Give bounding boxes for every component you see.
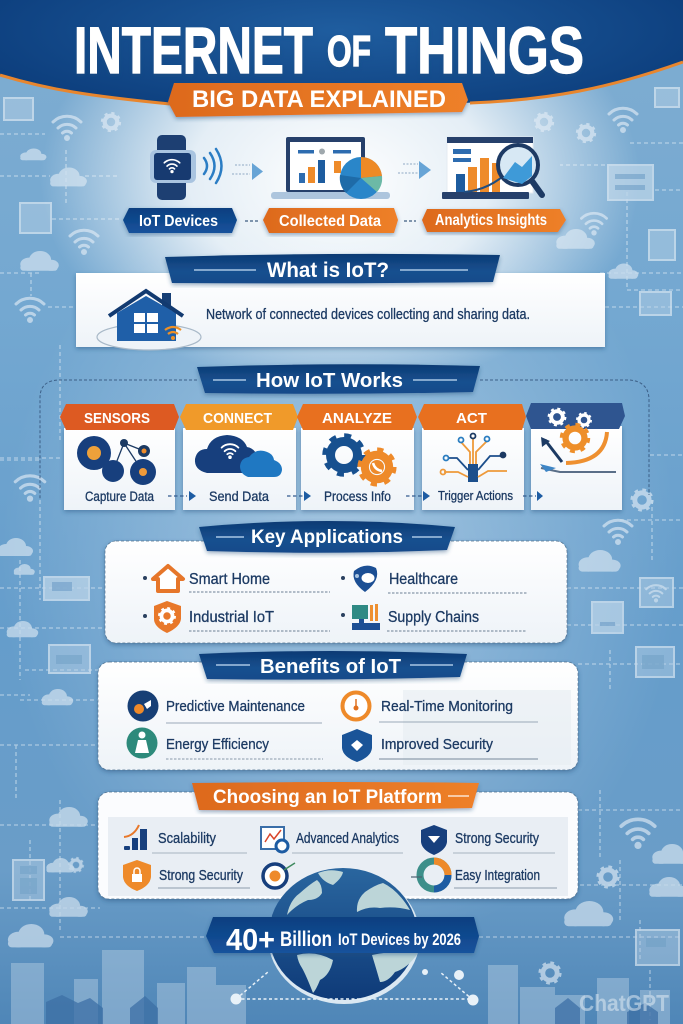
application: Supply Chains [341, 604, 527, 631]
application: Healthcare [341, 566, 527, 593]
criterion: Scalability [124, 825, 247, 853]
criterion: Strong Security [421, 825, 555, 855]
arrow: data to insights [398, 161, 431, 179]
benefit: Energy Efficiency [126, 728, 323, 759]
card: act [418, 404, 526, 510]
icon: smartwatch [150, 135, 222, 200]
card: connect [180, 404, 298, 510]
icon: laptop with charts [271, 137, 390, 199]
panel: benefits of IoT [98, 662, 578, 770]
flow arrows [168, 491, 543, 501]
label: IoT Devices: IoT Devices [139, 213, 218, 230]
card: connect: CONNECT [203, 410, 272, 427]
title [74, 13, 584, 87]
heading: How IoT Works: How IoT Works [256, 370, 403, 392]
criterion: Easy Integration: Easy Integration [455, 868, 540, 884]
label: Collected Data: Collected Data [279, 213, 381, 230]
heading: Benefits of IoT: Benefits of IoT [260, 656, 401, 678]
subtitle banner [168, 83, 468, 117]
criterion: Advanced Analytics: Advanced Analytics [296, 831, 399, 847]
icon: gears and cycle [540, 409, 616, 472]
icon: sensor network [77, 436, 156, 485]
card: analyze: Process Info [324, 488, 391, 504]
card: sensors: Capture Data [85, 489, 154, 504]
heading: Choosing an IoT Platform [192, 782, 479, 810]
card: act: Trigger Actions [438, 488, 513, 503]
panel: what is IoT [76, 273, 605, 350]
card: analyze [297, 404, 417, 510]
criterion: Strong Security (lock): Strong Security [159, 868, 244, 884]
icon: cloud wifi [195, 435, 282, 477]
stat banner: IoT Devices by 2026 [338, 931, 461, 949]
connector dashes [245, 220, 416, 222]
icon: smart home [97, 291, 201, 350]
criterion: Scalability: Scalability [158, 831, 217, 847]
application: Industrial IoT [143, 601, 330, 633]
application: Supply Chains: Supply Chains [388, 609, 479, 626]
benefit: Real-Time Monitoring: Real-Time Monitoring [381, 698, 513, 715]
panel: key applications [105, 541, 567, 643]
criterion: Strong Security (lock) [123, 860, 250, 891]
application: Smart Home [143, 566, 330, 592]
globe network nodes [230, 969, 478, 1006]
label: Analytics Insights [422, 209, 566, 232]
icon: analytics screen with magnifier [442, 137, 542, 199]
heading: Key Applications: Key Applications [251, 527, 403, 548]
stat banner [206, 917, 479, 957]
globe [268, 868, 420, 1004]
stat banner: Billion [280, 928, 332, 951]
benefit: Predictive Maintenance: Predictive Maintenance [166, 698, 305, 715]
subtitle banner: BIG DATA EXPLAINED [192, 86, 446, 113]
criterion: ring icon [263, 863, 295, 888]
city skyline [11, 950, 670, 1024]
criterion: Strong Security: Strong Security [455, 831, 540, 847]
benefit: Improved Security: Improved Security [381, 736, 493, 753]
title: THINGS [385, 13, 584, 87]
criterion: Easy Integration [411, 861, 557, 889]
arrow: devices to data [232, 163, 263, 180]
benefit: Improved Security [342, 729, 538, 762]
heading: How IoT Works [197, 364, 480, 394]
description: Network of connected devices collecting and sharing data. [206, 306, 530, 323]
card: connect: Send Data [209, 488, 269, 504]
stat banner: 40+ [226, 922, 275, 957]
icon: gears [325, 436, 394, 484]
heading: What is IoT?: What is IoT? [267, 259, 389, 282]
heading: What is IoT? [165, 254, 500, 283]
card: sensors: SENSORS [84, 410, 150, 427]
benefit: Predictive Maintenance [128, 690, 322, 723]
card: analyze: ANALYZE [322, 410, 392, 427]
icon: circuit [440, 434, 507, 482]
title: OF [327, 27, 371, 76]
label: Analytics Insights: Analytics Insights [435, 212, 547, 229]
application: Healthcare: Healthcare [389, 571, 458, 588]
heading: Choosing an IoT Platform: Choosing an IoT Platform [213, 786, 442, 808]
benefit: Energy Efficiency: Energy Efficiency [166, 736, 269, 753]
watermark: ChatGPT [579, 990, 669, 1016]
benefit: Real-Time Monitoring [342, 692, 538, 722]
panel: how IoT works outline [40, 380, 649, 500]
title: INTERNET [74, 13, 313, 87]
label: IoT Devices [123, 208, 237, 233]
heading: Benefits of IoT [199, 651, 467, 680]
heading: Key Applications [199, 521, 455, 553]
application: Smart Home: Smart Home [189, 571, 270, 588]
header band [0, 0, 683, 104]
panel: choosing an IoT platform [98, 792, 578, 899]
criterion: Advanced Analytics [261, 827, 403, 853]
label: Collected Data [263, 208, 398, 233]
card: sensors [60, 404, 179, 510]
application: Industrial IoT: Industrial IoT [189, 609, 274, 626]
card: act: ACT [456, 410, 487, 427]
card: outcome [526, 403, 625, 510]
